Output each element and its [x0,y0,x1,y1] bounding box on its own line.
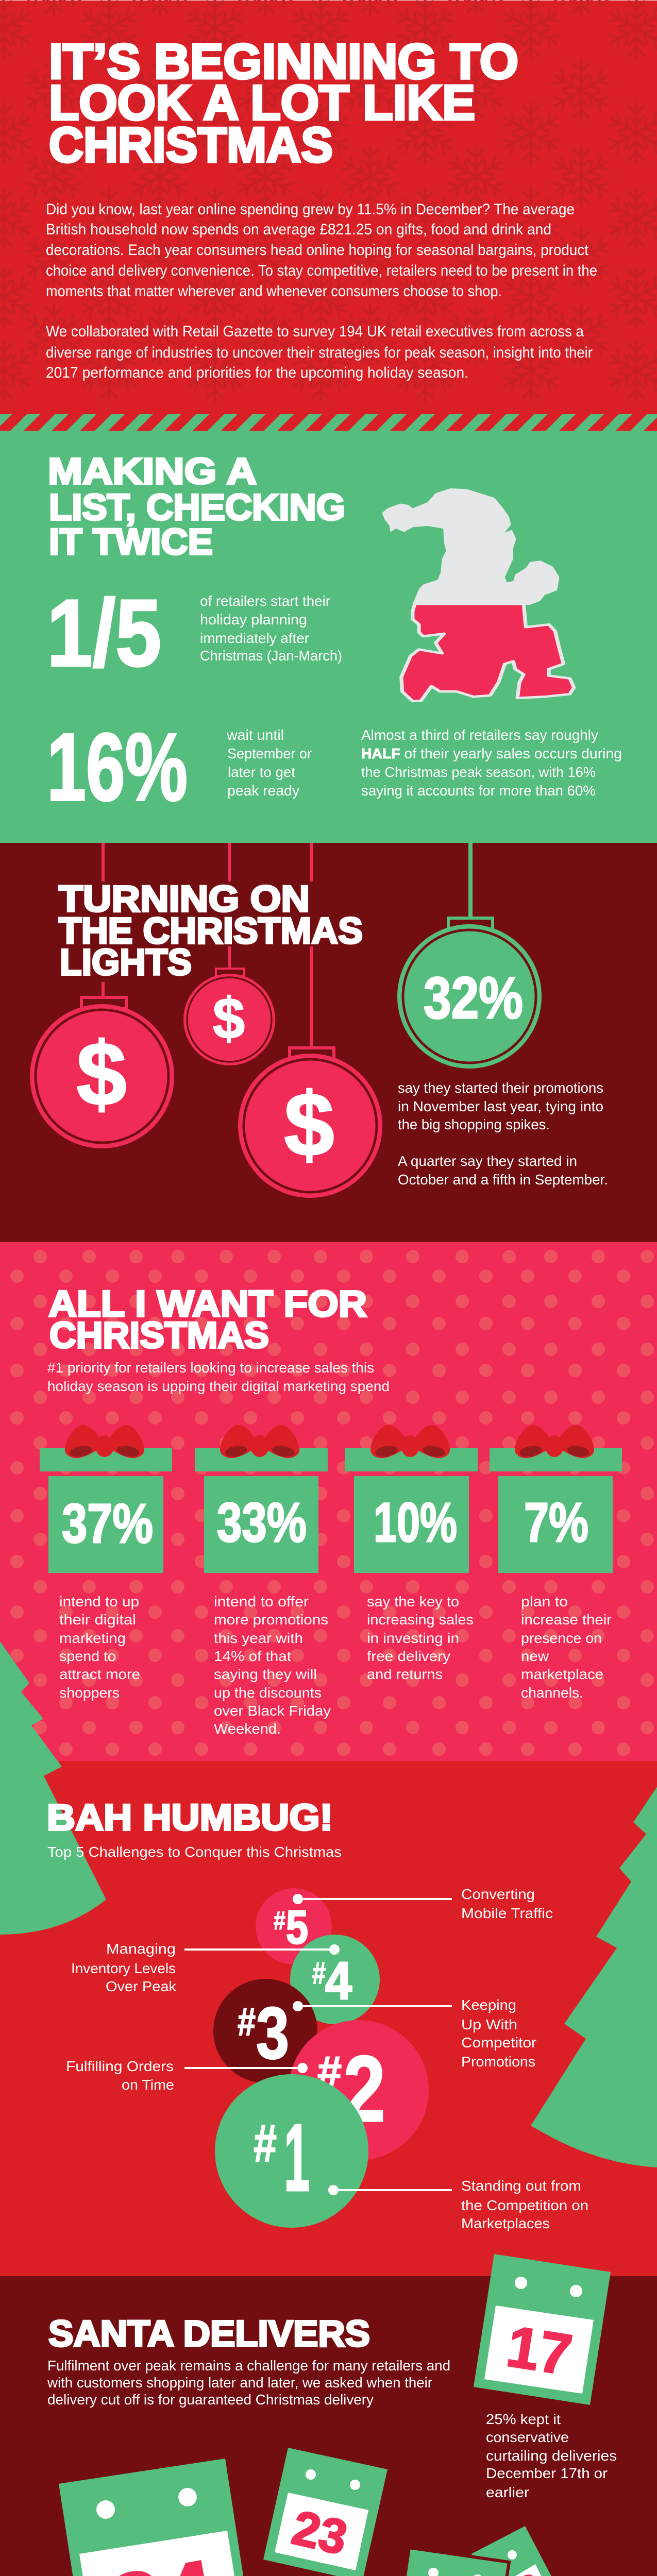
bubble: number 4 [290,1935,380,2024]
subheading: #1 priority for retailers looking to increase sales this [47,1360,374,1376]
heading: CHRISTMAS [49,1315,269,1356]
label: marketplaces [461,2178,588,2231]
label: marketplaces: Standing out from [461,2178,581,2194]
calendar: 17 [474,2254,611,2405]
caption: 37 percent: shoppers [59,1685,120,1701]
caption: 10 percent: and returns [367,1666,443,1682]
calendar: 20 [393,2548,509,2576]
caption: 37 percent: attract more [59,1666,140,1682]
intro paragraph one: choice and delivery convenience. To stay competitive, retailers need to be present in the [46,262,597,279]
callout lines [184,1894,452,2195]
panel: intro [0,0,657,401]
label: mobile traffic: Mobile Traffic [461,1905,553,1921]
caption: 33 percent [214,1594,331,1737]
intro paragraph one: moments that matter wherever and whenever consumers choose to shop. [46,283,502,300]
panel: making a list [47,451,622,821]
polka dot pattern [10,1250,654,1756]
text: fulfilment: delivery cut off is for guaranteed Christmas delivery [47,2392,374,2408]
heading: BAH HUMBUG! [47,1798,333,1838]
label: marketplaces: Marketplaces [461,2215,550,2231]
intro paragraph one: Did you know, last year online spending grew by 11.5% in December? The average [46,201,575,218]
label: competitor promotions: Keeping [461,1997,516,2013]
caption: 7 percent: plan to [521,1594,568,1609]
text: promotions timing: say they started their promotions [398,1080,603,1096]
icon: bauble left: $ [76,1024,127,1125]
text: half of sales: saying it accounts for more than 60% [361,783,596,799]
caption: 10 percent [367,1594,474,1682]
caption: 17th: 25% kept it [486,2411,561,2427]
title: IT’S BEGINNING TO [49,34,518,89]
caption: 33 percent: up the discounts [214,1685,322,1701]
bubble: number 5 [256,1888,332,1964]
subheading: Top 5 Challenges to Conquer this Christmas [47,1844,342,1860]
title: CHRISTMAS [49,117,333,173]
intro paragraph two: diverse range of industries to uncover their strategies for peak season, insight into their [46,344,593,361]
heading: IT TWICE [49,522,213,563]
caption: 7 percent [521,1594,612,1701]
bubble: number 1 [215,2074,368,2228]
caption: 17th: December 17th or [486,2465,608,2481]
caption: 17th: curtailing deliveries [486,2448,617,2464]
label: competitor promotions: Promotions [461,2054,535,2070]
subheading: holiday season is upping their digital marketing spend [47,1378,390,1394]
text: one fifth [200,593,342,664]
text: sixteen percent: peak ready [227,783,299,799]
icon: santa silhouette [382,488,574,701]
label: marketplaces: the Competition on [461,2197,588,2213]
label: fulfilling orders [66,2058,174,2093]
intro paragraph one: decorations. Each year consumers head online hoping for seasonal bargains, product [46,242,589,259]
panel: bah humbug [47,1798,588,2231]
gift: 33 percent: 33% [217,1491,307,1553]
text: one fifth: holiday planning [200,612,307,628]
label: inventory: Over Peak [106,1978,177,1994]
text: promotions timing: in November last year, tying into [398,1098,603,1114]
icon: left christmas tree [0,1641,106,1935]
caption: 17th [486,2411,617,2500]
icon: green bauble with 32 percent: 32% [424,965,523,1031]
text: half of sales: HALF of their yearly sales occurs during [361,745,622,761]
text: half of sales [361,727,622,799]
calendar: 24 [59,2459,255,2576]
label: mobile traffic [461,1886,553,1921]
label: competitor promotions: Up With [461,2016,517,2032]
gift: 37 percent: 37% [62,1492,153,1554]
gift: 10 percent: 10% [374,1491,457,1553]
intro paragraph one [46,201,597,300]
label: inventory: Managing [106,1941,176,1957]
icon: bauble small: $ [213,986,245,1050]
bubble: number 5: 5 [286,1901,308,1954]
text: fulfilment: with customers shopping later and later, we asked when their [47,2375,432,2391]
label: competitor promotions [461,1997,536,2070]
text: promotions timing: the big shopping spikes. [398,1116,550,1132]
title [49,34,518,173]
intro paragraph one: British household now spends on average £821.25 on gifts, food and drink and [46,221,551,238]
heading: ALL I WANT FOR [48,1284,367,1325]
text: half of sales: Almost a third of retailers say roughly [361,727,598,743]
caption: 7 percent: new [521,1648,549,1664]
gift: 7 percent: 7% [524,1491,588,1553]
bubble: number 1: 1 [284,2105,310,2211]
intro paragraph two [46,323,593,381]
caption: 17th: conservative [486,2429,569,2445]
heading [48,1284,367,1356]
subheading [47,1360,390,1394]
caption: 17th: earlier [486,2484,529,2500]
text: sixteen percent: September or [227,745,312,761]
icon: bauble lower [238,1048,382,1198]
label: mobile traffic: Converting [461,1886,535,1902]
gift: 10 percent [345,1425,478,1573]
heading: THE CHRISTMAS [59,911,363,952]
heading: SANTA DELIVERS [48,2314,370,2354]
caption: 33 percent: saying they will [214,1666,317,1682]
stat: sixteen percent: 16% [47,714,188,821]
gift: 37 percent [40,1425,172,1573]
text: sixteen percent [226,727,312,799]
caption: 37 percent: their digital [59,1612,136,1628]
heading: TURNING ON [59,879,310,920]
bubble: number 3: 3 [256,1992,289,2074]
stat: one fifth: 1/5 [47,580,161,686]
gift captions [59,1594,612,1737]
panel: turning on the christmas lights [30,843,608,1198]
bubble: number 2 [289,2020,429,2160]
icon: bauble left [30,997,174,1148]
calendar: 17: 17 [502,2314,576,2387]
caption: 7 percent: presence on [521,1630,602,1646]
intro paragraph two: We collaborated with Retail Gazette to survey 194 UK retail executives from across a [46,323,584,340]
text: sixteen percent: wait until [226,727,284,743]
text: one fifth: of retailers start their [200,593,330,609]
icon: right christmas tree [531,1787,657,2167]
heading: MAKING A [48,451,257,492]
caption: 33 percent: intend to offer [214,1594,309,1609]
caption: 7 percent: channels. [521,1685,583,1701]
title: LOOK A LOT LIKE [49,75,475,130]
heading [48,451,345,563]
label: fulfilling orders: Fulfilling Orders [66,2058,174,2074]
bubble: number 4: # [312,1956,326,1990]
text: promotions timing [398,1080,608,1188]
icon: bauble small [183,969,275,1065]
heading: LIGHTS [60,942,192,983]
snowflake pattern [0,0,657,401]
candy cane stripe divider [0,414,657,431]
panel: all i want for christmas [10,1250,654,1756]
gift: 33 percent [195,1425,328,1573]
calendar: 23 [263,2448,388,2576]
label: inventory [71,1941,177,1994]
text: one fifth: immediately after [200,630,309,646]
text: sixteen percent: later to get [228,764,295,780]
text: one fifth: Christmas (Jan-March) [200,648,342,664]
heading [59,879,363,983]
label: fulfilling orders: on Time [122,2077,174,2093]
caption: 37 percent: spend to [59,1648,116,1664]
text: promotions timing: A quarter say they started in [398,1153,577,1169]
caption: 10 percent: say the key to [367,1594,459,1609]
caption: 33 percent: over Black Friday [214,1703,331,1719]
text: fulfilment: Fulfilment over peak remains a challenge for many retailers and [47,2358,450,2374]
intro paragraph two: 2017 performance and priorities for the upcoming holiday season. [46,364,468,381]
icon: green bauble with 32 percent [397,918,542,1069]
hanging strings [102,843,473,1047]
text: fulfilment [47,2358,450,2408]
icon: bauble lower: $ [284,1075,334,1175]
calendar: 23: 23 [288,2500,352,2565]
bubble: number 1: # [254,2114,277,2174]
panel: santa delivers [47,2254,617,2576]
label: inventory: Inventory Levels [71,1960,176,1976]
bubble: number 2: # [317,2048,342,2095]
caption: 33 percent: more promotions [214,1612,328,1628]
caption: 37 percent [59,1594,140,1701]
text: promotions timing: October and a fifth in September. [398,1172,608,1188]
label: competitor promotions: Competitor [461,2035,536,2050]
caption: 33 percent: 14% of that [214,1648,291,1664]
caption: 7 percent: marketplace [521,1666,603,1682]
caption: 10 percent: free delivery [367,1648,450,1664]
caption: 7 percent: increase their [521,1612,612,1628]
bubble: number 3: # [238,2000,256,2044]
bubble: number 3 [213,1979,317,2083]
text: half of sales: the Christmas peak season, with 16% [361,764,596,780]
caption: 33 percent: Weekend. [214,1721,281,1737]
caption: 37 percent: intend to up [59,1594,139,1609]
caption: 37 percent: marketing [59,1630,126,1646]
bubble: number 2: 2 [343,2036,385,2141]
bubble: number 5: # [274,1906,285,1935]
gift: 7 percent [490,1425,622,1573]
bubble: number 4: 4 [325,1951,352,2010]
caption: 33 percent: this year with [214,1630,303,1646]
calendar: 18 [471,2526,570,2576]
caption: 10 percent: increasing sales [367,1612,474,1628]
caption: 10 percent: in investing in [367,1630,459,1646]
heading: LIST, CHECKING [49,487,345,528]
